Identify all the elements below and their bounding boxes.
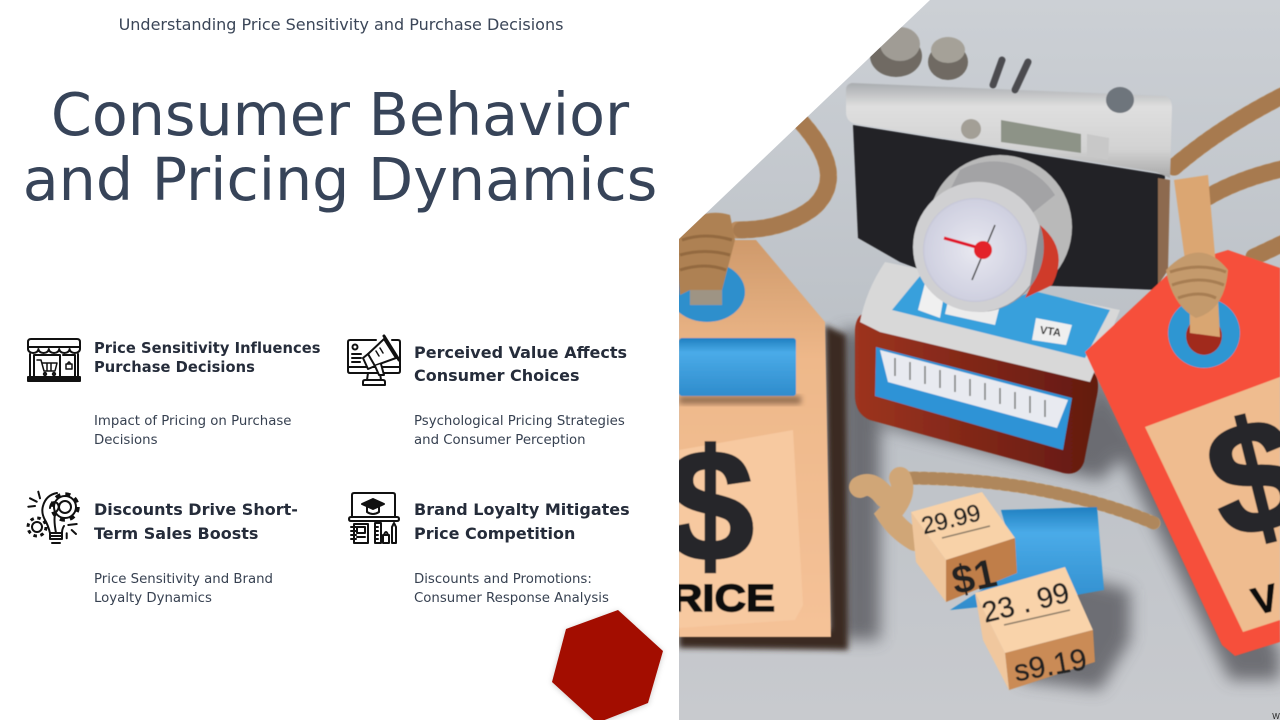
heading: Price Competition xyxy=(414,524,575,543)
heading xyxy=(414,343,627,385)
left price tag: RICE xyxy=(671,578,775,620)
description xyxy=(94,572,273,606)
title: and Pricing Dynamics xyxy=(23,146,657,214)
knotted rope xyxy=(860,478,1154,540)
heading xyxy=(414,500,630,543)
icon: lightbulb with gears xyxy=(26,490,80,544)
heading: Brand Loyalty Mitigates xyxy=(414,500,630,519)
subtitle: Understanding Price Sensitivity and Purchase Decisions xyxy=(119,15,563,34)
heading: Perceived Value Affects xyxy=(414,343,627,362)
camera base: VTA xyxy=(1039,325,1062,339)
background surface xyxy=(679,0,1280,720)
description: Price Sensitivity and Brand xyxy=(94,572,273,587)
decorative red hexagon xyxy=(550,610,665,720)
description: Impact of Pricing on Purchase xyxy=(94,414,291,429)
description xyxy=(94,414,291,448)
price cube: 29.99: 29.99 xyxy=(919,499,984,540)
heading: Price Sensitivity Influences xyxy=(94,340,321,357)
heading: Purchase Decisions xyxy=(94,359,255,376)
price cube: 29.99 xyxy=(911,492,1017,603)
title xyxy=(23,81,657,214)
description: Psychological Pricing Strategies xyxy=(414,414,625,429)
price cube: 23.99: s9.19 xyxy=(1011,643,1089,688)
title: Consumer Behavior xyxy=(51,81,629,149)
price cube: 23.99 xyxy=(975,567,1095,690)
description xyxy=(414,572,609,606)
price cube: 23.99: 23 . 99 xyxy=(979,577,1073,630)
soft shadows xyxy=(840,330,1280,690)
photo: camera gauge and price tags xyxy=(679,0,1280,720)
item: discounts xyxy=(26,490,298,606)
icon: storefront with cart xyxy=(27,338,81,382)
description: Discounts and Promotions: xyxy=(414,572,592,587)
right price tag xyxy=(1085,175,1280,656)
heading: Term Sales Boosts xyxy=(94,524,258,543)
icon: laptop with graduation cap and stationery xyxy=(348,492,400,544)
heading: Consumer Choices xyxy=(414,366,580,385)
item: perceived value xyxy=(347,334,627,448)
gauge dial xyxy=(913,155,1072,312)
price cube: 29.99: $1 xyxy=(948,551,1001,603)
item: price sensitivity xyxy=(27,338,321,448)
icon: monitor with megaphone xyxy=(347,334,401,386)
left price tag: $ xyxy=(666,418,754,594)
description: Consumer Response Analysis xyxy=(414,591,609,606)
blue cup xyxy=(950,507,1104,610)
camera body xyxy=(846,27,1172,300)
rope: behind camera xyxy=(737,92,1280,257)
heading xyxy=(94,340,321,376)
heading xyxy=(94,500,298,543)
description: Decisions xyxy=(94,433,158,448)
left price tag xyxy=(666,213,831,637)
dark tag edge shadow xyxy=(679,325,848,650)
description: Loyalty Dynamics xyxy=(94,591,212,606)
heading: Discounts Drive Short- xyxy=(94,500,298,519)
description xyxy=(414,414,625,448)
camera base xyxy=(855,262,1120,474)
item: brand loyalty xyxy=(348,492,630,606)
description: and Consumer Perception xyxy=(414,433,586,448)
